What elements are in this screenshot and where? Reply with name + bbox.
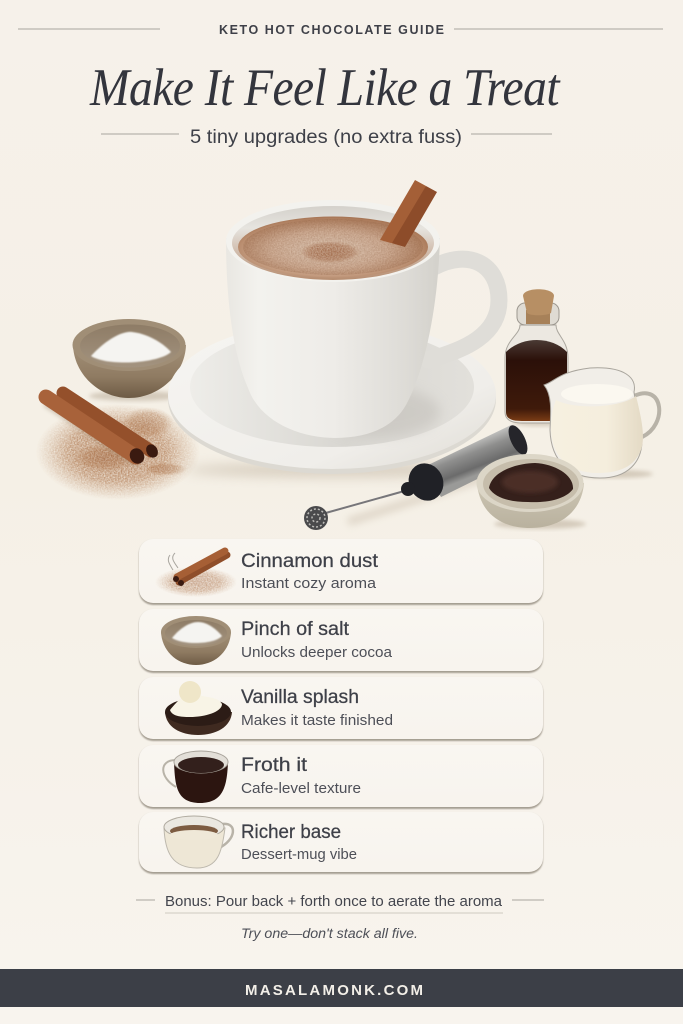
icon: glass cup of cream — [164, 816, 233, 868]
text: froth it — [241, 755, 361, 797]
icon: vanilla bottle — [505, 289, 568, 426]
text: vanilla splash: Vanilla splash — [241, 687, 359, 708]
hero illustration: hot chocolate and ingredients — [36, 180, 659, 530]
icon: cinnamon stick in mug — [380, 180, 437, 247]
footer band — [0, 969, 683, 1007]
icon: mug handle — [428, 259, 499, 360]
subtitle: 5 tiny upgrades (no extra fuss) — [190, 127, 462, 148]
bonus tip: Bonus: Pour back + forth once to aerate the aroma — [165, 894, 503, 910]
icon: saucer — [168, 321, 496, 477]
text: vanilla splash: Makes it taste finished — [241, 713, 393, 729]
icon: salt bowl — [72, 319, 186, 401]
text: pinch of salt: Pinch of salt — [241, 619, 350, 640]
text: cinnamon dust: Instant cozy aroma — [241, 576, 377, 592]
footer band: MASALAMONK.COM — [245, 982, 423, 999]
panel: upgrade 1, cinnamon dust — [139, 539, 543, 605]
text: froth it: Cafe-level texture — [241, 781, 361, 797]
text: richer base: Richer base — [241, 822, 341, 843]
icon: milk frother — [304, 423, 531, 530]
panel: upgrade 4, froth it — [139, 745, 543, 809]
closing note: Try one—don't stack all five. — [241, 926, 418, 941]
title: Make It Feel Like a Treat — [89, 59, 561, 117]
icon: cinnamon dust pile — [36, 404, 200, 500]
text: richer base — [241, 822, 357, 863]
icon: chocolate ramekin — [476, 454, 586, 529]
panel: upgrade 5, richer base — [139, 812, 543, 874]
panel: upgrade 2, pinch of salt — [139, 609, 543, 673]
icon: cinnamon sticks — [46, 393, 160, 466]
icon: salt bowl — [161, 616, 231, 665]
icon: vanilla cream in dark bowl — [165, 681, 232, 735]
text: richer base: Dessert-mug vibe — [241, 847, 357, 863]
icon: white mug — [226, 200, 440, 438]
text: pinch of salt: Unlocks deeper cocoa — [241, 645, 393, 661]
icon: glass of dark coffee — [163, 751, 228, 803]
text: pinch of salt — [241, 619, 393, 661]
text: froth it: Froth it — [241, 755, 308, 776]
text: cinnamon dust: Cinnamon dust — [241, 551, 379, 572]
icon: cinnamon sticks with steam — [155, 551, 237, 597]
panel: upgrade 3, vanilla splash — [139, 677, 543, 741]
text: cinnamon dust — [241, 551, 379, 592]
eyebrow header: KETO HOT CHOCOLATE GUIDE — [219, 23, 444, 37]
icon: milk jug — [544, 368, 659, 478]
text: vanilla splash — [241, 687, 393, 729]
